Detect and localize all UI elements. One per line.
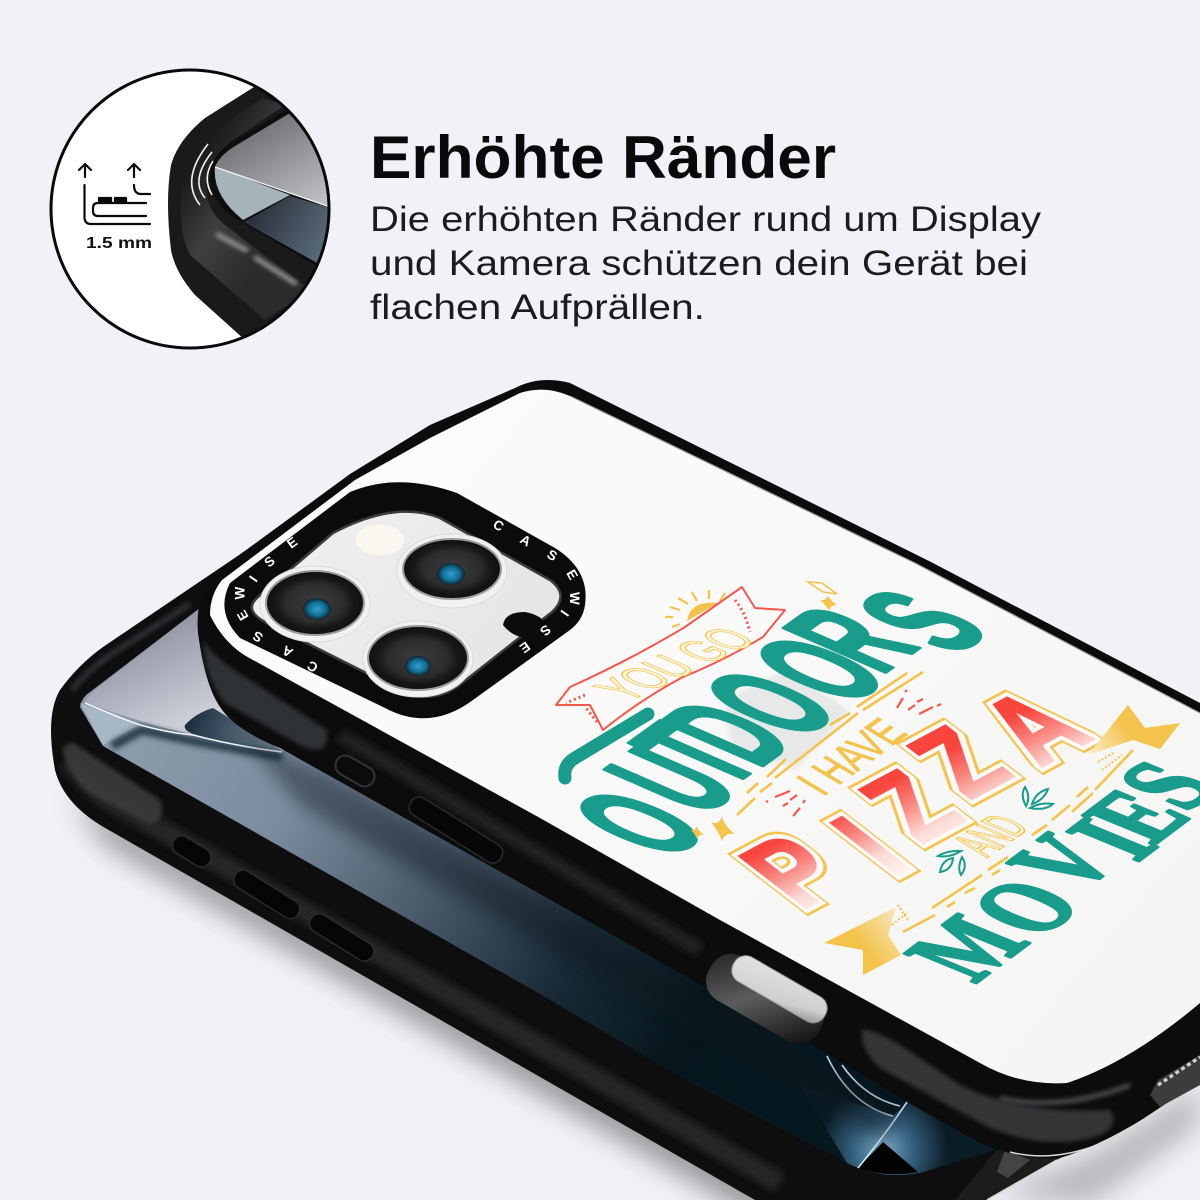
- lower phone buttons: [169, 832, 377, 965]
- inset phone body: [168, 87, 316, 337]
- silver edge along top of back: [570, 396, 1200, 713]
- ribbon star upper: [1088, 705, 1180, 755]
- speaker grille: [1150, 1055, 1200, 1107]
- dashed divider lines: [737, 672, 1133, 932]
- ring text left: CASEWISE: [232, 534, 320, 675]
- case side highlight: [340, 735, 700, 950]
- inset impact arcs: [192, 144, 213, 205]
- case body: [198, 380, 1200, 1158]
- description text: [370, 200, 1042, 327]
- circle background: [51, 70, 329, 348]
- red tick marks: [766, 690, 941, 816]
- screen glow reflection: [800, 1056, 995, 1175]
- volume and side buttons: [332, 752, 506, 867]
- bottom silver edge: [1010, 1082, 1200, 1156]
- inset white line: [215, 167, 330, 207]
- metal side button: [698, 946, 832, 1052]
- screen white reflection line: [85, 703, 282, 752]
- PIZZA lettering: PIZZA: [700, 669, 1140, 936]
- lower phone rim highlight: [68, 760, 780, 1183]
- icon measurement label: 1.5 mm: [86, 235, 152, 252]
- lens top right: [397, 534, 507, 608]
- sparkles: [691, 582, 837, 841]
- screen light wedge: [80, 703, 140, 745]
- lens left: [260, 566, 370, 642]
- bottom translucent patch: [862, 1030, 1113, 1142]
- shadow bottom right: [990, 1085, 1200, 1200]
- lower phone port strip: [955, 1146, 1060, 1200]
- inset highlights: [218, 235, 295, 283]
- corner translucent patch by camera: [203, 640, 327, 750]
- circle outline: [51, 70, 329, 348]
- bottom rim highlight: [1000, 1085, 1130, 1103]
- sun: [665, 590, 725, 627]
- ring text right: CASEWISE: [490, 517, 582, 656]
- magnet ghost: [725, 668, 850, 770]
- flash: [356, 524, 404, 556]
- shadow on lower screen: [240, 735, 900, 1140]
- inset screen navy: [244, 196, 328, 262]
- navy screen shape: [185, 708, 285, 752]
- lower phone corner translucent patch: [62, 742, 162, 824]
- inset circle: raised edge detail: [51, 70, 340, 348]
- inset side band: [181, 98, 310, 320]
- inset screen gray: [210, 110, 327, 265]
- raised edge icon: [79, 164, 150, 224]
- teal drops: [938, 787, 1053, 875]
- banner text: YOU GO: [582, 621, 771, 707]
- AND lettering: AND: [940, 808, 1043, 863]
- printed lettering artwork: [510, 560, 1200, 995]
- dark strip below reflection: [112, 730, 282, 757]
- I HAVE lettering: I HAVE: [785, 711, 918, 802]
- screen gray upper reflection: [85, 608, 340, 752]
- camera window: [252, 512, 561, 697]
- lower phone bottom port: [997, 1150, 1030, 1178]
- lidar sensor: [503, 612, 546, 638]
- camera bump: [224, 482, 586, 718]
- star hatch dots: [892, 752, 1122, 925]
- upper phone: back with printed case: [198, 380, 1200, 1158]
- shadow under lower phone: [70, 795, 780, 1200]
- description text: Die erhöhten Ränder rund um Display: [370, 200, 1042, 239]
- OUTDOORS lettering: OUTDOORS: [510, 560, 1024, 876]
- heading: Erhöhte Ränder: [370, 124, 836, 191]
- inset screen lower left: [215, 167, 290, 220]
- lower phone screen gradient: [80, 608, 1000, 1175]
- lower phone silver edge: [987, 1160, 1057, 1200]
- description text: flachen Aufprällen.: [370, 288, 705, 327]
- banner: [556, 587, 785, 730]
- lens bottom: [363, 621, 473, 697]
- lower phone top rim highlight: [72, 604, 190, 690]
- description text: und Kamera schützen dein Gerät bei: [370, 244, 1028, 283]
- printed white back: [210, 390, 1200, 1083]
- lower phone: case with screen and buttons: [51, 478, 1200, 1200]
- camera ring outer: [224, 482, 586, 718]
- T crossbar swash: [565, 714, 648, 778]
- lower phone case body: [51, 478, 1060, 1200]
- ribbon star lower: [824, 907, 901, 975]
